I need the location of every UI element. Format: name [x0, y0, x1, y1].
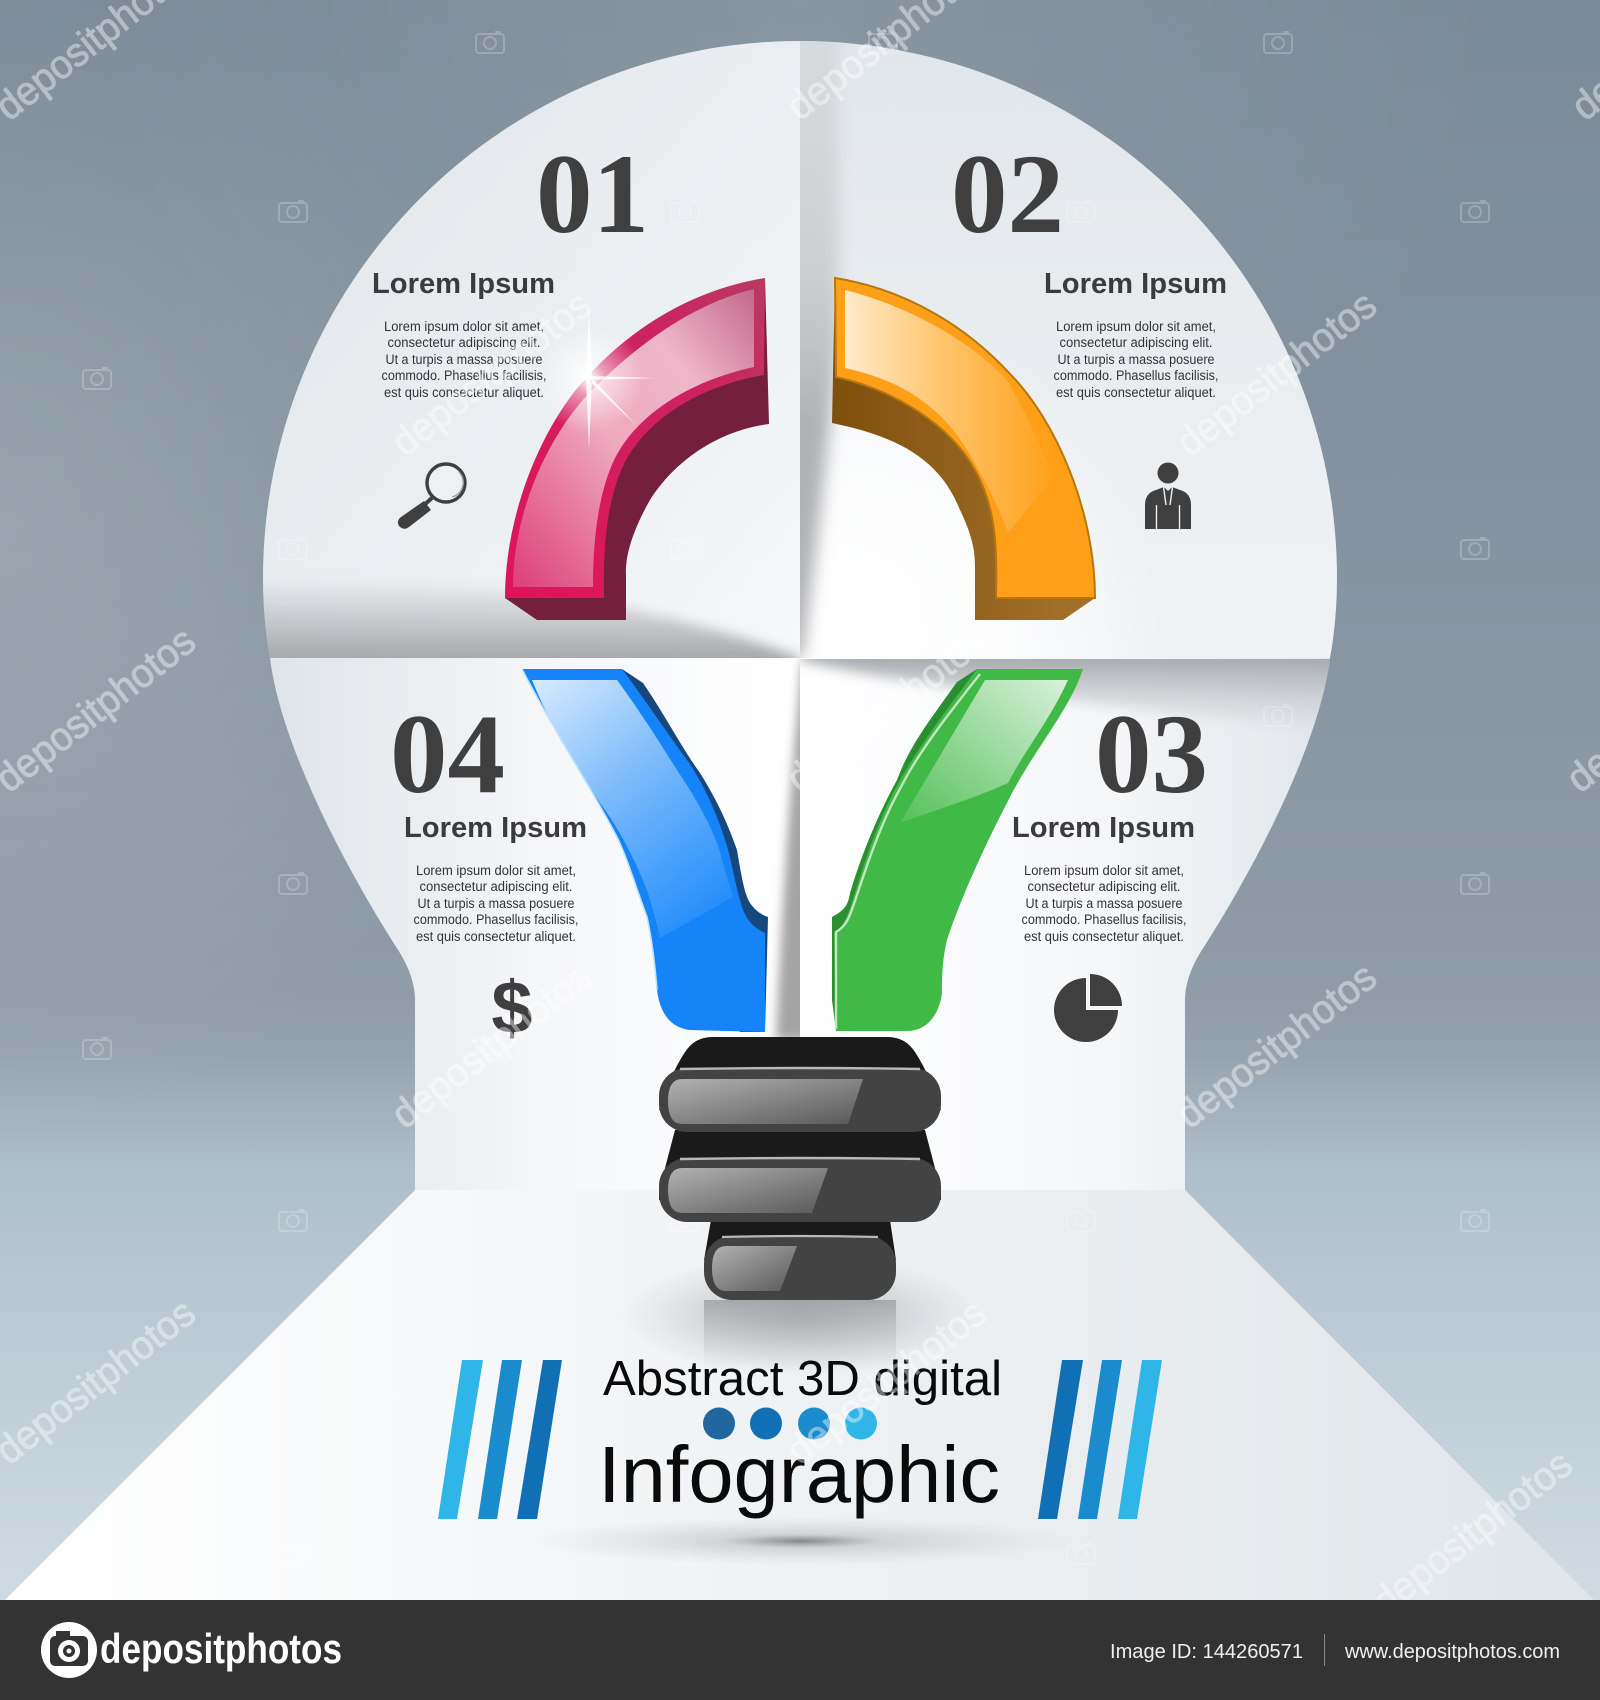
watermarks: depositphotos	[1168, 955, 1385, 1137]
title line 2: Infographic	[598, 1430, 1000, 1519]
icon: business person	[1145, 462, 1191, 529]
text block 01: consectetur adipiscing elit.	[388, 335, 540, 350]
text block 02: est quis consectetur aliquet.	[1056, 385, 1216, 400]
text block 04: consectetur adipiscing elit.	[420, 879, 572, 894]
screw thread 1	[659, 1068, 941, 1132]
paper fold shading: quadrant 4	[770, 658, 800, 1037]
text block 04: commodo. Phasellus facilisis,	[414, 912, 578, 927]
text block 01: Lorem ipsum dolor sit amet,	[384, 319, 544, 334]
text block 04	[414, 863, 578, 944]
title ground shadow	[531, 1517, 1071, 1565]
heading: Lorem Ipsum 01: Lorem Ipsum	[372, 268, 555, 300]
watermarks: depositphotos	[1168, 283, 1385, 465]
paper highlight: quadrant 2	[800, 424, 1058, 658]
footer url: www.depositphotos.com	[1344, 1641, 1560, 1663]
icon: orange arc segment 02	[832, 278, 1095, 620]
icon: magnifying glass	[398, 464, 465, 529]
title dots	[703, 1408, 877, 1440]
title decoration: right stripes	[1038, 1360, 1162, 1519]
watermarks: depositphotos	[383, 283, 600, 465]
icon: dollar sign: $	[491, 966, 533, 1049]
text block 01: commodo. Phasellus facilisis,	[382, 368, 546, 383]
text block 03: Lorem ipsum dolor sit amet,	[1024, 863, 1184, 878]
heading number 02: 02	[951, 132, 1064, 257]
text block 03: est quis consectetur aliquet.	[1024, 929, 1184, 944]
text block 03: Ut a turpis a massa posuere	[1026, 896, 1182, 911]
icon: pink arc segment 01	[505, 278, 769, 620]
base reflection	[704, 1300, 896, 1370]
screw thread 3	[704, 1236, 896, 1300]
screw thread 2	[659, 1158, 941, 1222]
footer logo wordmark: depositphotos	[100, 1625, 342, 1672]
heading number 03: 03	[1095, 692, 1208, 817]
text block 02: commodo. Phasellus facilisis,	[1054, 368, 1218, 383]
panel: quadrant 2 paper	[800, 41, 1337, 658]
paper fold shading: quadrant 1	[264, 587, 800, 658]
panel: quadrant 1 paper	[263, 41, 800, 658]
text block 03: consectetur adipiscing elit.	[1028, 879, 1180, 894]
footer bar	[0, 1600, 1600, 1700]
text block 04: est quis consectetur aliquet.	[416, 929, 576, 944]
title line 1: Abstract 3D digital	[603, 1352, 1002, 1406]
text block 04: Lorem ipsum dolor sit amet,	[416, 863, 576, 878]
text block 04: Ut a turpis a massa posuere	[418, 896, 574, 911]
watermark icons	[83, 31, 1489, 1564]
base shadow on floor	[620, 1255, 980, 1375]
watermarks: depositphotos	[778, 619, 995, 801]
panel: quadrant 4 paper	[270, 658, 800, 1190]
text block 02: consectetur adipiscing elit.	[1060, 335, 1212, 350]
text block 03	[1022, 863, 1186, 944]
heading: Lorem Ipsum 04: Lorem Ipsum	[404, 812, 587, 844]
text block 02	[1054, 319, 1218, 400]
footer logo icon	[41, 1622, 97, 1678]
base dark lower	[704, 1220, 896, 1260]
heading: Lorem Ipsum 03: Lorem Ipsum	[1012, 812, 1195, 844]
paper fold shading: quadrant 3	[800, 659, 1330, 720]
icon: green segment 03	[832, 669, 1083, 1031]
text block 02: Lorem ipsum dolor sit amet,	[1056, 319, 1216, 334]
panel: quadrant 3 paper	[800, 658, 1330, 1190]
icon: bulb screw base	[659, 1037, 941, 1300]
title decoration: left stripes	[438, 1360, 562, 1519]
watermarks: depositphotos	[1364, 1442, 1581, 1624]
base dark middle	[659, 1130, 941, 1200]
icon: blue segment 04	[522, 669, 768, 1032]
text block 01: Ut a turpis a massa posuere	[386, 352, 542, 367]
heading number 04: 04	[390, 692, 505, 817]
base dark top	[659, 1037, 941, 1110]
heading number 01: 01	[536, 132, 649, 257]
text block 01: est quis consectetur aliquet.	[384, 385, 544, 400]
text block 03: commodo. Phasellus facilisis,	[1022, 912, 1186, 927]
watermarks: depositphotos	[383, 955, 600, 1137]
icon: light flare	[534, 310, 655, 450]
icon: pie chart	[1054, 974, 1122, 1042]
floor	[5, 1190, 1594, 1600]
watermarks: depositphotos	[778, 1291, 995, 1473]
footer image id: Image ID: 144260571	[1110, 1641, 1303, 1663]
text block 01	[382, 319, 546, 400]
heading: Lorem Ipsum 02: Lorem Ipsum	[1044, 268, 1227, 300]
paper fold shading: quadrant 2	[800, 41, 843, 658]
text block 02: Ut a turpis a massa posuere	[1058, 352, 1214, 367]
